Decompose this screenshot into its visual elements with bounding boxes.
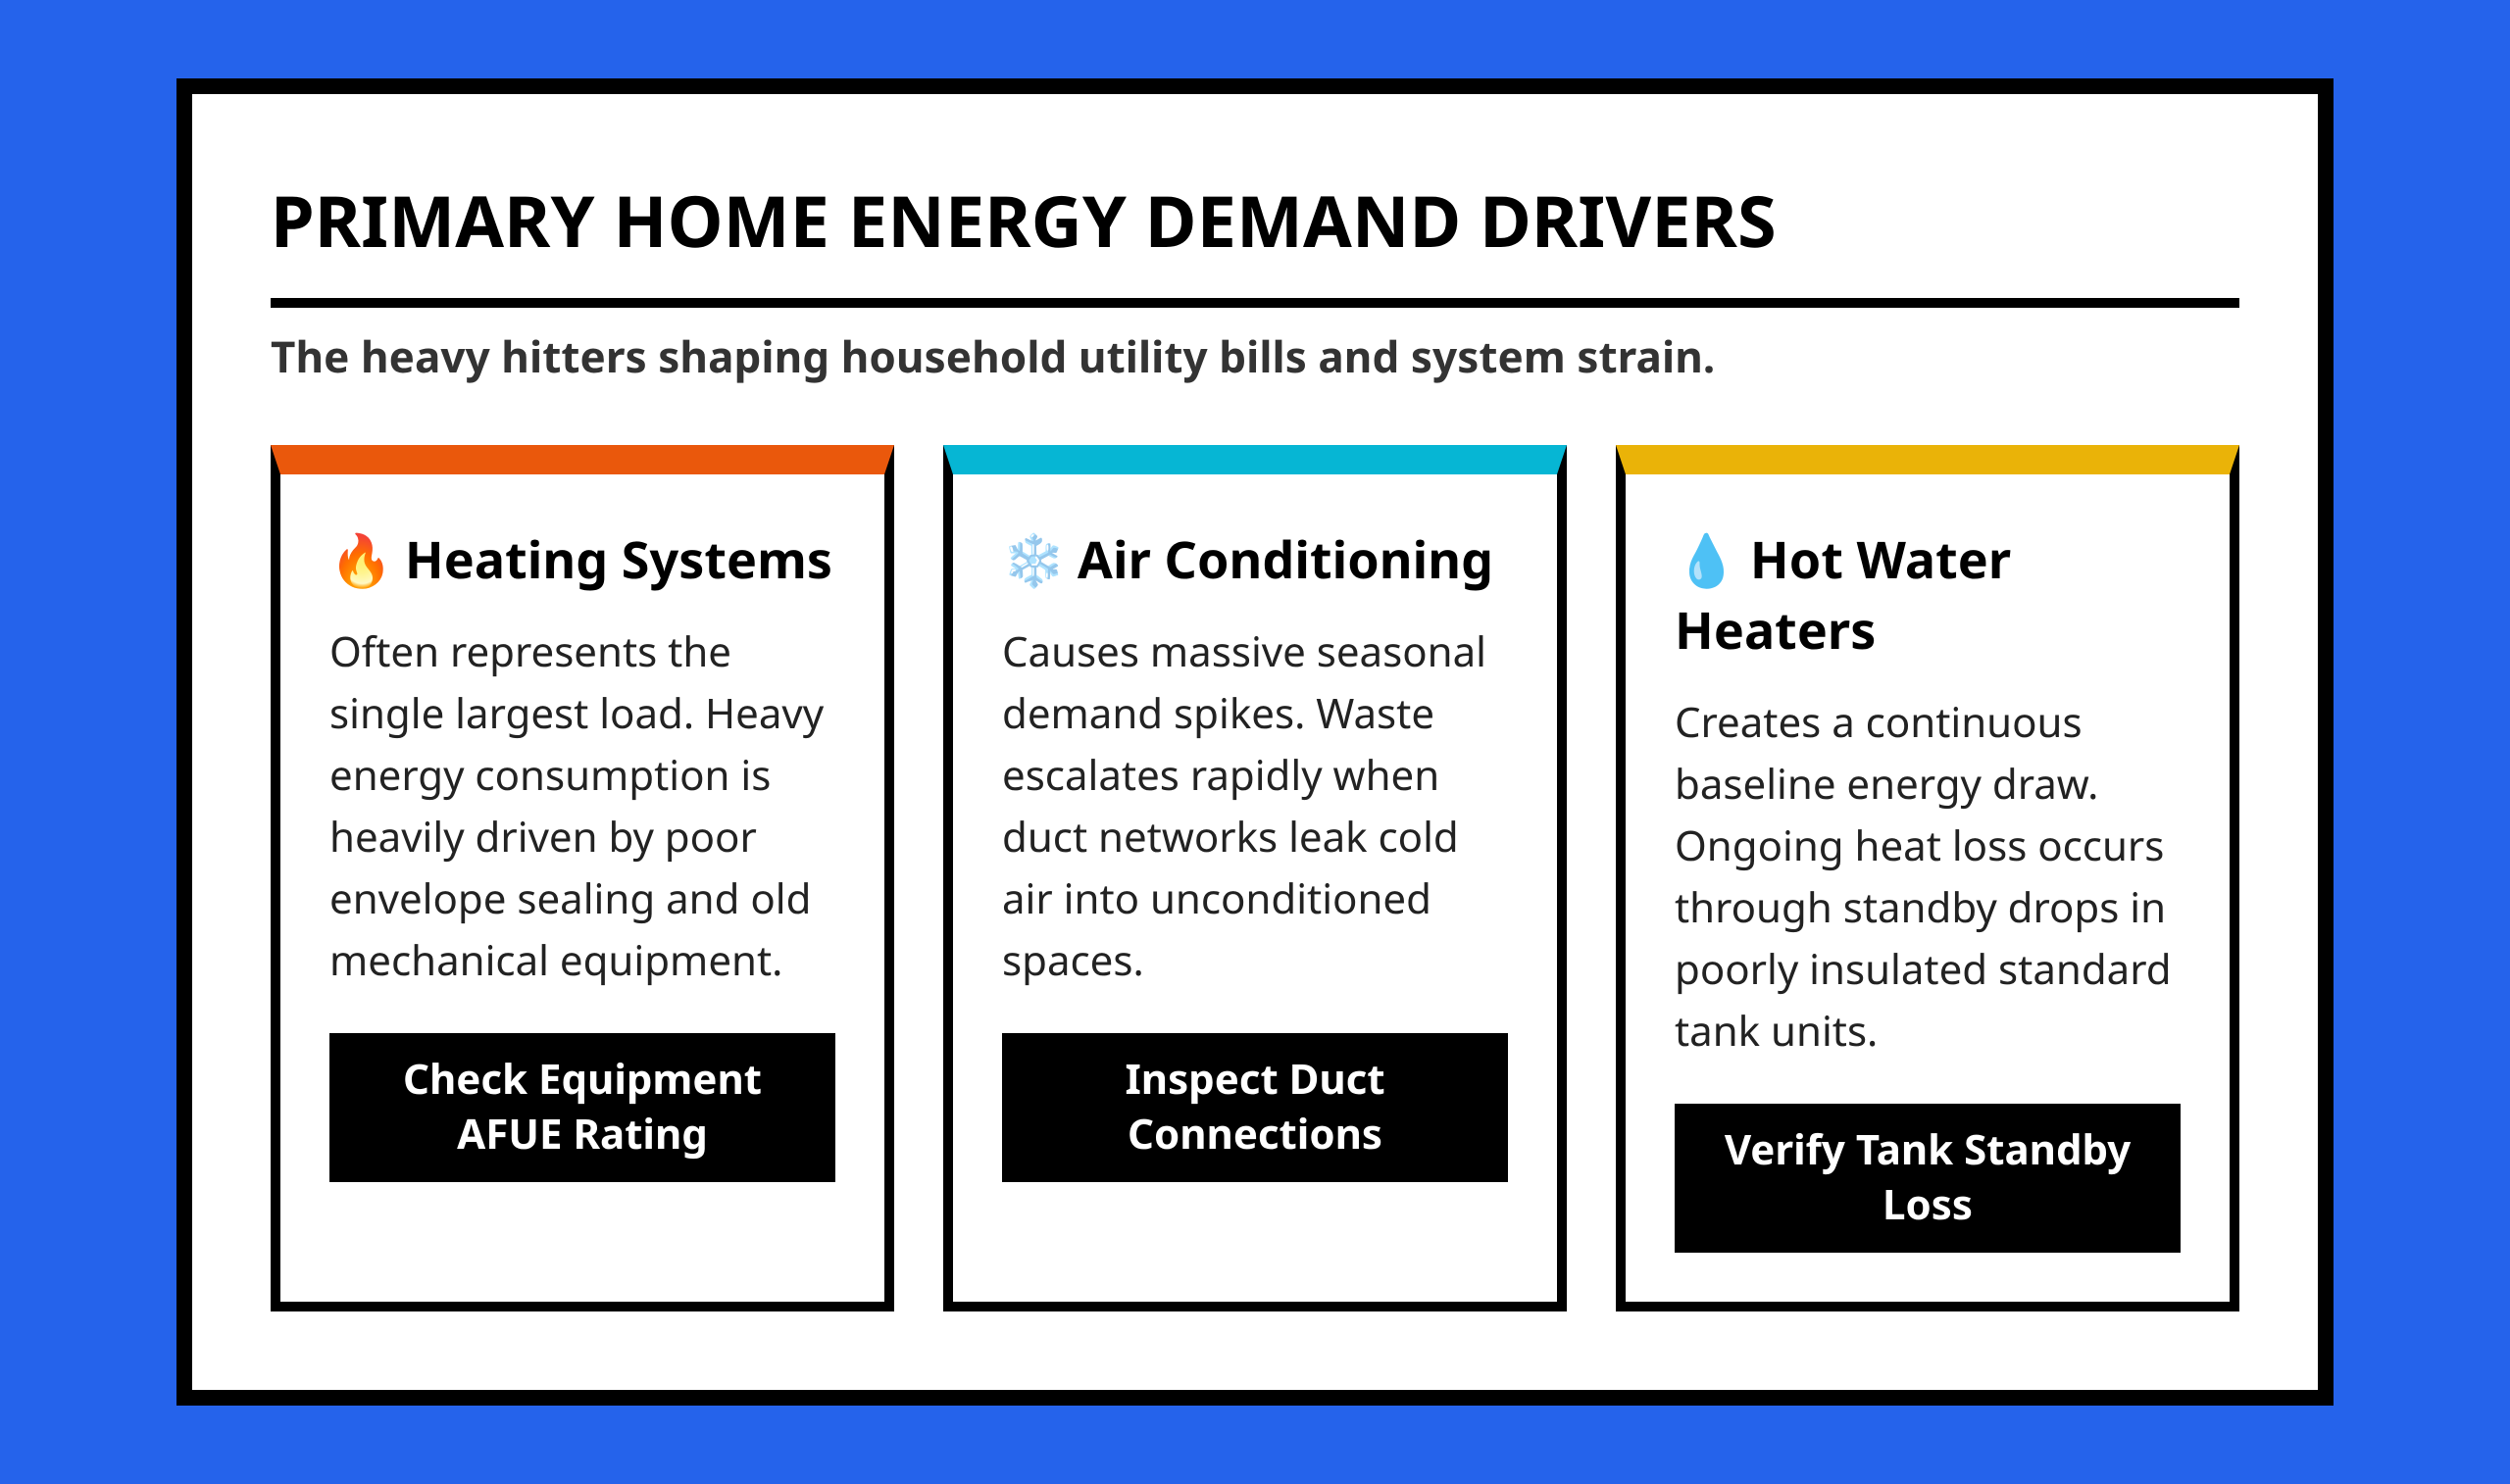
text: heating description: single largest load. Heavy bbox=[329, 685, 824, 741]
title: PRIMARY HOME ENERGY DEMAND DRIVERS bbox=[271, 173, 1777, 269]
heading: hot water heaters with droplet icon: Heaters bbox=[1675, 595, 1876, 665]
main frame panel bbox=[176, 78, 2334, 1406]
button: check equipment bbox=[329, 1033, 835, 1182]
heading: heating systems with flame icon: 🔥 Heating Systems bbox=[329, 524, 832, 594]
panel: hot water heaters bbox=[1616, 445, 2239, 1311]
button: inspect duct: Connections bbox=[1128, 1106, 1382, 1161]
button: verify tank: Loss bbox=[1882, 1176, 1973, 1231]
heading: hot water heaters with droplet icon: 💧 Hot Water bbox=[1675, 524, 2011, 594]
subtitle: The heavy hitters shaping household utility bills and system strain. bbox=[271, 326, 1715, 385]
text: heating description: envelope sealing and old bbox=[329, 870, 811, 926]
text: heating description: energy consumption is bbox=[329, 747, 771, 803]
text: air conditioning description: spaces. bbox=[1002, 932, 1144, 988]
panel: air conditioning bbox=[943, 445, 1567, 1311]
panel: heating systems bbox=[271, 445, 894, 1311]
text: air conditioning description: air into unconditioned bbox=[1002, 870, 1431, 926]
text: air conditioning description: escalates rapidly when bbox=[1002, 747, 1439, 803]
button: verify tank bbox=[1675, 1104, 2181, 1253]
text: hot water description bbox=[1675, 694, 2172, 1059]
text: air conditioning description: duct networks leak cold bbox=[1002, 809, 1459, 865]
text: hot water description: Creates a continuous bbox=[1675, 694, 2083, 750]
text: heating description: mechanical equipment. bbox=[329, 932, 782, 988]
text: hot water description: poorly insulated standard bbox=[1675, 941, 2172, 997]
text: air conditioning description bbox=[1002, 623, 1486, 988]
button: check equipment: AFUE Rating bbox=[457, 1106, 708, 1161]
heading: hot water heaters with droplet icon bbox=[1675, 524, 2011, 665]
text: hot water description: through standby drops in bbox=[1675, 879, 2166, 935]
button: inspect duct bbox=[1002, 1033, 1508, 1182]
text: heating description: heavily driven by poor bbox=[329, 809, 757, 865]
text: heating description bbox=[329, 623, 824, 988]
text: hot water description: baseline energy draw. bbox=[1675, 756, 2098, 812]
text: hot water description: tank units. bbox=[1675, 1003, 1878, 1059]
heading: air conditioning with snowflake icon: ❄️ Air Conditioning bbox=[1002, 524, 1493, 594]
button: verify tank: Verify Tank Standby bbox=[1725, 1121, 2131, 1177]
text: hot water description: Ongoing heat loss occurs bbox=[1675, 817, 2164, 873]
button: inspect duct: Inspect Duct bbox=[1125, 1051, 1385, 1107]
text: air conditioning description: Causes massive seasonal bbox=[1002, 623, 1486, 679]
text: heating description: Often represents the bbox=[329, 623, 731, 679]
button: check equipment: Check Equipment bbox=[403, 1051, 762, 1107]
text: air conditioning description: demand spikes. Waste bbox=[1002, 685, 1434, 741]
